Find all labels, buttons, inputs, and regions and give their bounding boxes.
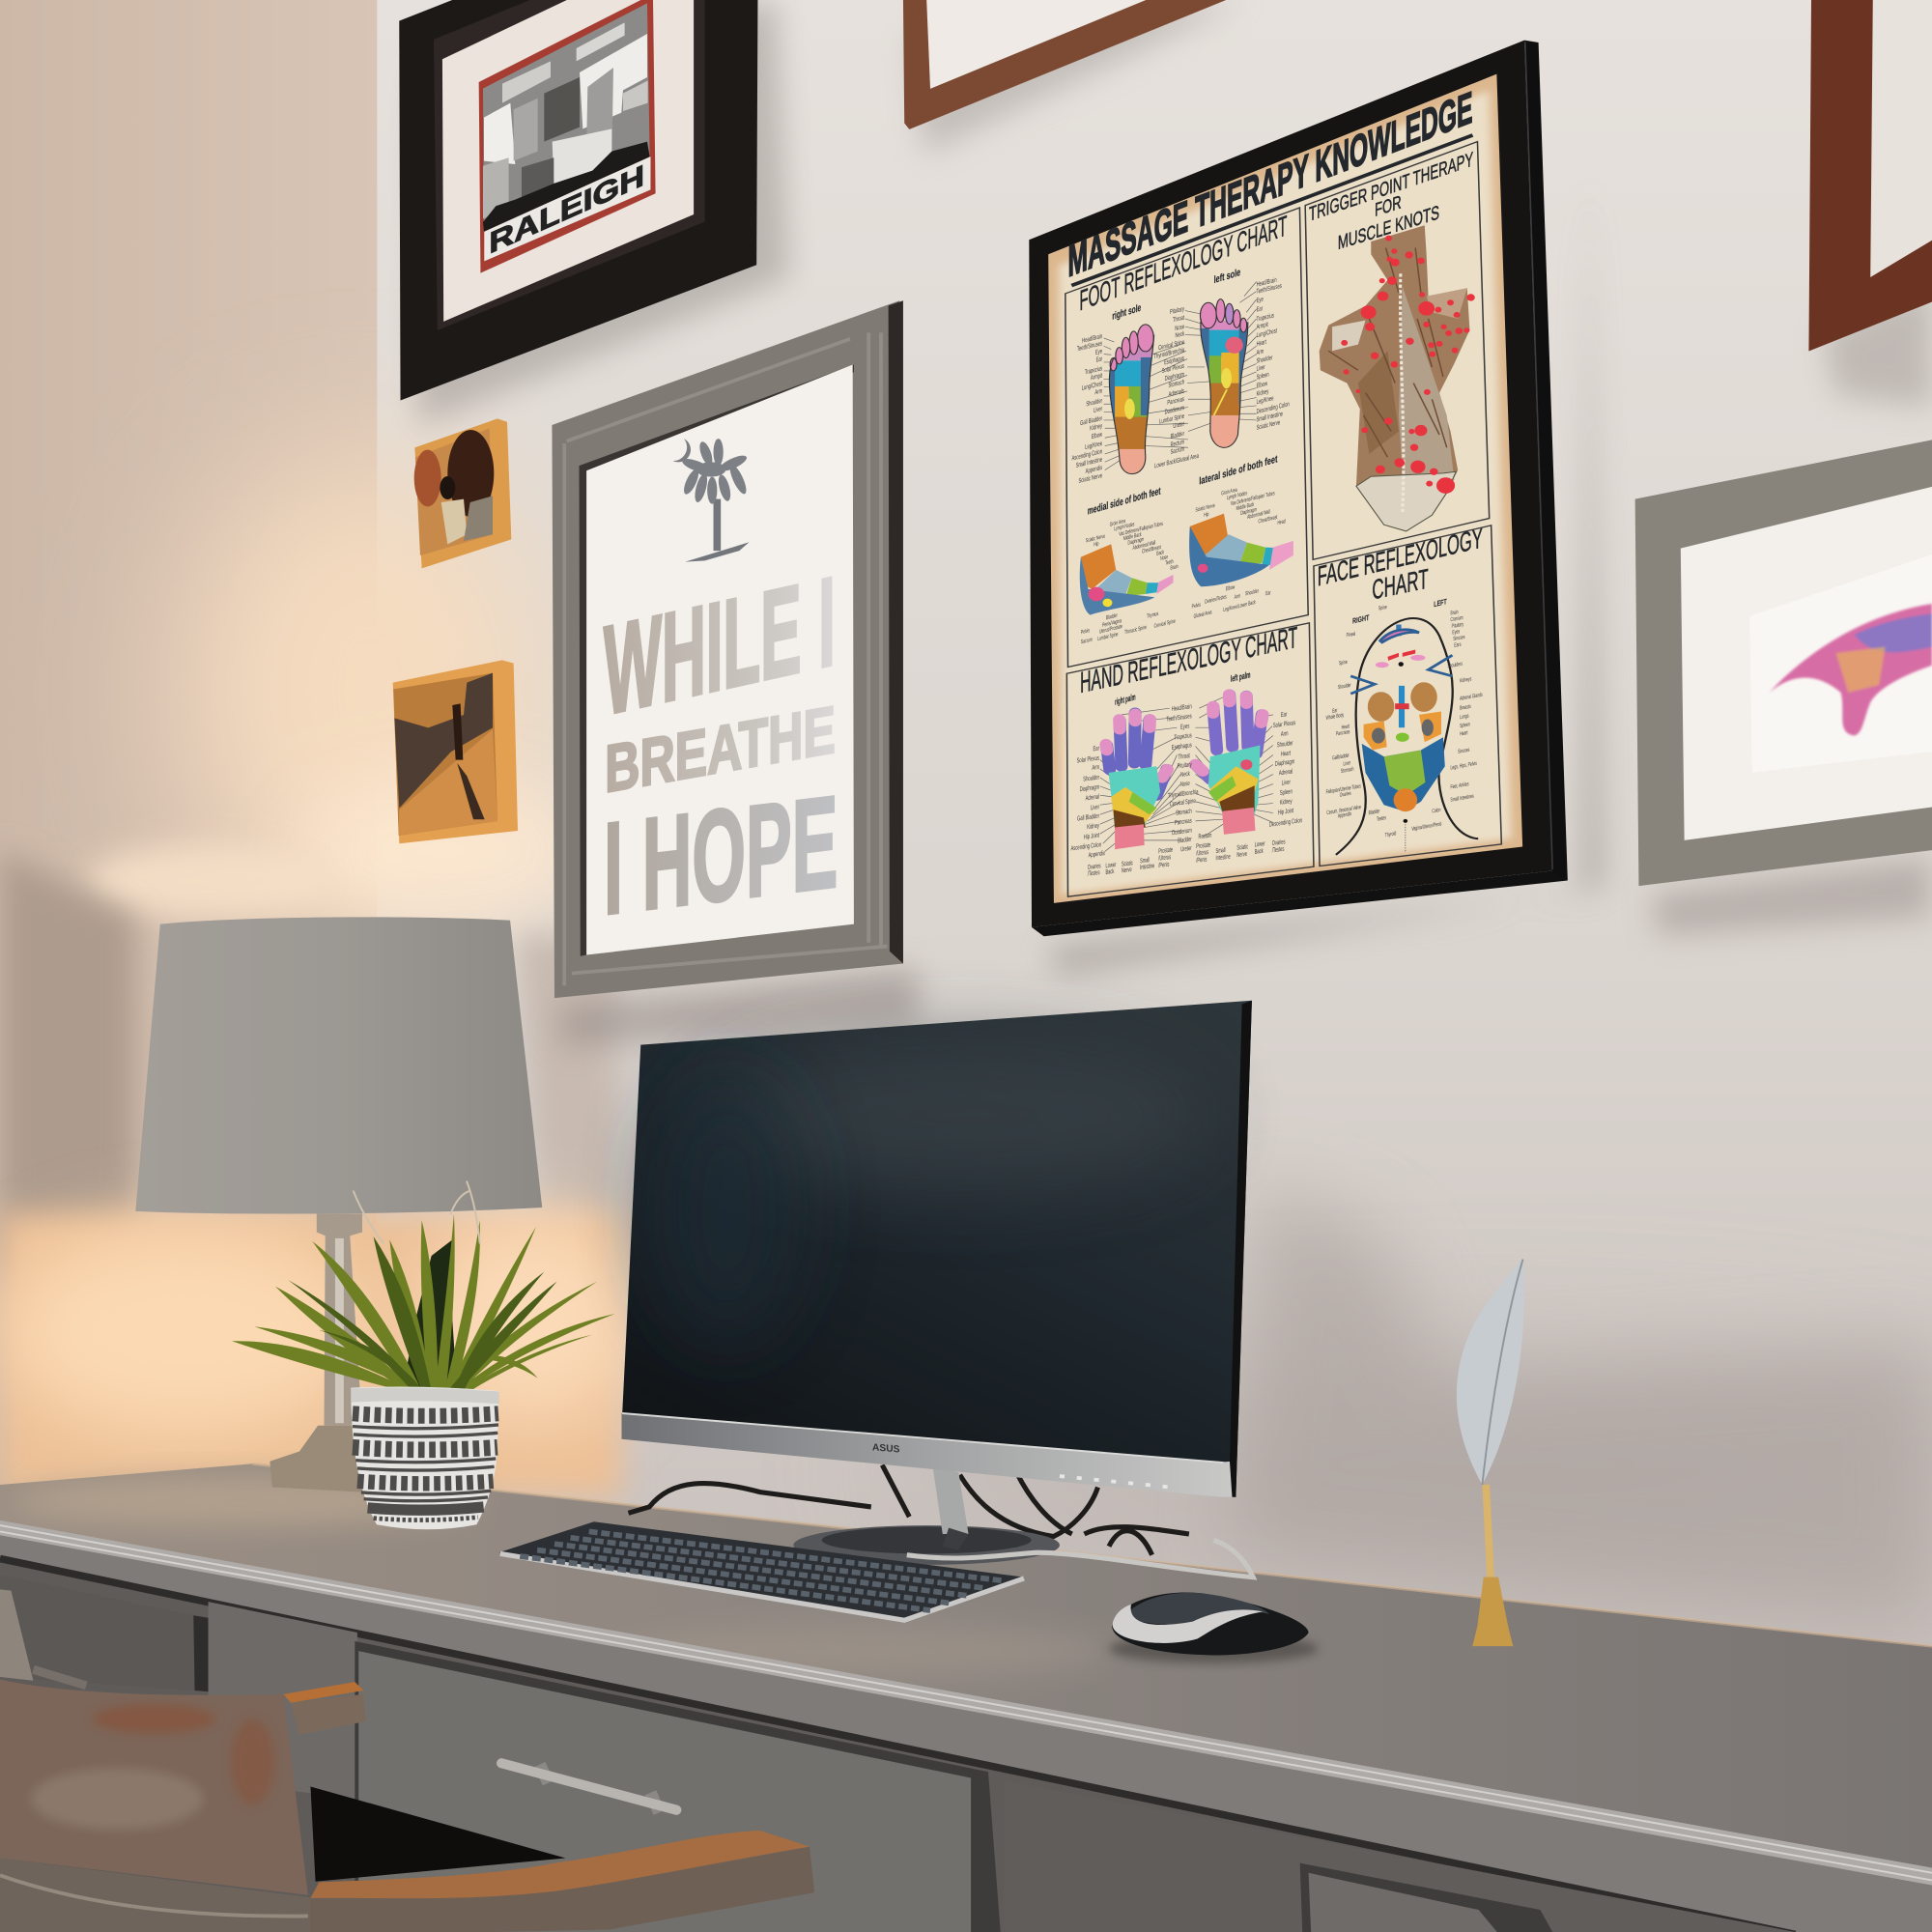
labels: right sole: Leg/Knee (1085, 440, 1102, 452)
labels: centre of hands: Neck (1180, 771, 1190, 780)
labels: right hand: Ear (1094, 746, 1099, 753)
monitor stand (793, 1525, 1060, 1565)
labels: centre of hands: Head/Brain (1172, 703, 1192, 713)
print border (479, 0, 656, 273)
labels: right sole: Teeth/Sinuses (1077, 340, 1102, 354)
leader lines: soles (1104, 282, 1257, 470)
labels: left sole (1257, 274, 1290, 432)
labels: centre of hands: Pituitary (1178, 761, 1192, 771)
labels: foot side views: Thoracic Spine (1124, 624, 1147, 637)
chair back rail (0, 1680, 308, 1895)
labels: centre column: Cervical Spine (1158, 339, 1184, 353)
chair arm (310, 1847, 814, 1932)
labels: bottom of hands (1088, 823, 1286, 879)
labels: left sole: Heart (1257, 339, 1266, 349)
labels: foot side views: Chest/Breast (1259, 514, 1278, 526)
labels: centre column: Bladder (1171, 431, 1184, 440)
labels: centre of hands: Cervical Spine (1170, 798, 1196, 809)
photo block: couple (414, 418, 511, 568)
frame: While I Breathe I Hope (552, 300, 918, 1047)
labels: face: Feet, Ankles (1451, 781, 1469, 791)
labels: right sole: Ascending Colon (1072, 448, 1102, 463)
labels: foot side views: Abdominal Wall (1247, 508, 1270, 522)
labels: face: Eyes (1452, 628, 1460, 637)
labels: face: Heart (1342, 723, 1350, 731)
labels: foot side views: Middle Back (1236, 501, 1255, 513)
labels: face: Lungs (1460, 713, 1469, 722)
labels: face: Breasts (1460, 703, 1471, 712)
labels: centre of hands: Ureter (1180, 845, 1192, 854)
labels: left sole: Lung/Chest (1257, 327, 1277, 340)
labels: left sole: Descending Colon (1257, 401, 1290, 416)
chair (0, 1589, 814, 1932)
labels: foot side views: Sciatic Nerve (1196, 502, 1215, 514)
heading: chart: CHART (1372, 563, 1429, 606)
labels: centre of hands: Nose (1180, 781, 1190, 789)
labels: right sole: Elbow (1092, 432, 1103, 441)
labels: left sole: Eye (1257, 297, 1264, 305)
labels: bottom of hands: /Uterus (1196, 849, 1208, 858)
labels: face: Ear (1332, 707, 1338, 715)
monitor screen (622, 1001, 1252, 1497)
labels: centre of hands: Teeth/Sinuses (1166, 713, 1192, 724)
labels: bottom of hands: Rectum (1199, 833, 1212, 841)
drawer handle (501, 1763, 676, 1812)
labels: left hand: Spleen (1280, 788, 1293, 797)
labels: left sole: Sciatic Nerve (1257, 419, 1280, 432)
desk rim (0, 1520, 1932, 1886)
labels: foot side views: Arm (1235, 593, 1240, 601)
labels: centre column: Thyroid/Bronchia (1153, 347, 1185, 361)
labels: centre column: Ureter (1173, 421, 1184, 431)
chair rail end (283, 1682, 363, 1703)
labels: bottom of hands: Small (1216, 847, 1226, 856)
labels: centre of hands: Duodenum (1172, 828, 1192, 838)
labels: right sole: Appendix (1086, 465, 1102, 475)
labels: foot side views: Elbow (1226, 583, 1236, 593)
labels: face: Shoulder (1338, 682, 1351, 692)
chart: medial foot (1080, 544, 1174, 615)
labels: right sole: Gall Bladder (1080, 415, 1102, 428)
frame: top right brown (1808, 0, 1932, 407)
labels: face: Colon (1432, 807, 1441, 815)
labels: left hand: Hip Joint (1278, 808, 1293, 817)
labels: centre of hands: Eyes (1180, 724, 1189, 731)
labels: centre of hands: Stomach (1176, 809, 1192, 817)
labels: face: Cecum, Ileocecal Valve (1326, 804, 1361, 817)
lamp base (270, 1426, 362, 1492)
labels: left sole: Leg/Knee (1257, 395, 1274, 407)
labels: right sole: Trapezius (1085, 365, 1102, 377)
labels: centre of hands: Thyroid/Bronchia (1168, 789, 1199, 800)
labels: left sole: Trapezius (1257, 313, 1274, 324)
labels: right hand: Arm (1092, 764, 1099, 772)
frame: top centre brown (903, 0, 1244, 154)
labels: centre column: Nose (1175, 324, 1184, 333)
labels: foot side views: Lumbar Spine (1097, 631, 1119, 643)
desk (0, 1463, 1932, 1932)
text: BREATHE: BREATHE (605, 692, 836, 807)
heading: trigger point therapy: TRIGGER POINT THERAPY (1309, 147, 1473, 225)
labels: foot side views: Head (1277, 518, 1286, 527)
labels: right hand: Shoulder (1083, 775, 1099, 783)
labels: bottom of hands: Sciatic (1122, 860, 1133, 868)
labels: foot side views: Sciatic Nerve (1086, 533, 1105, 545)
labels: right sole: Liver (1094, 406, 1102, 414)
figure: back muscles (1320, 225, 1475, 531)
labels: bottom of hands: Lower (1106, 862, 1117, 870)
label: left: LEFT (1434, 597, 1447, 609)
labels: left hand: Descending Colon (1269, 817, 1302, 829)
label: lateral side of both feet: lateral side of both feet (1199, 453, 1278, 487)
brand label: ASUS (872, 1442, 900, 1456)
icon: palmetto tree and moon (672, 439, 750, 562)
cables (629, 1465, 1189, 1555)
labels: centre column: Lower Back/Gluteal Area (1154, 453, 1199, 470)
plant (232, 1181, 615, 1392)
labels: left sole: Armpit (1257, 322, 1268, 331)
labels: centre of hands: Esophagus (1172, 742, 1192, 752)
trigger point dots (1341, 236, 1475, 494)
labels: face: Kidneys (1460, 675, 1472, 685)
labels: left hand: Adrenal (1279, 769, 1293, 778)
labels: face: Adrenal Glands (1460, 692, 1483, 702)
labels: bottom of hands: /Testes (1272, 846, 1285, 855)
labels: left hand: Diaphragm (1275, 758, 1294, 768)
labels: bottom of hands: Small (1140, 857, 1150, 866)
poster paper (1048, 74, 1522, 903)
photo block: beach silhouette (393, 660, 518, 843)
labels: face: Pineal (1347, 631, 1355, 639)
labels: foot side views: Vas Deferens/Fallopian Tubes (1231, 490, 1275, 508)
monitor shadow on wall (1233, 1182, 1932, 1627)
labels: right hand: Solar Plexus (1077, 755, 1099, 765)
labels: foot side views: Gluteal Area (1194, 609, 1212, 620)
labels: foot side views: Cervical Spine (1154, 618, 1176, 630)
labels: foot side views: Ovaries/Testes (1205, 593, 1227, 606)
panel: hand reflexology (1066, 621, 1314, 896)
labels: right hand: Liver (1091, 804, 1099, 812)
labels: foot side views: Uterus/Prostate (1099, 623, 1122, 636)
labels: left sole: Small Intestine (1257, 411, 1283, 424)
labels: foot side views: Diaphragm (1127, 536, 1144, 547)
labels: face: Shoulders (1447, 661, 1463, 670)
panel: face reflexology (1314, 523, 1501, 867)
labels: foot side views (1081, 475, 1286, 649)
labels: right hand: Hip Joint (1084, 833, 1099, 841)
labels: foot side views: Thymus (1147, 611, 1159, 620)
labels: bottom of hands: Intestine (1140, 863, 1154, 871)
labels: bottom of hands: Nerve (1236, 851, 1247, 860)
labels: centre column (1153, 302, 1199, 470)
labels: face: Spine (1339, 659, 1348, 668)
chart: face (1336, 618, 1478, 855)
labels: face: Gallbladder (1332, 753, 1350, 762)
labels: bottom of hands: /Penis (1196, 857, 1208, 865)
labels: foot side views: Groin Area (1110, 518, 1125, 528)
labels: face: Ovaries (1340, 790, 1351, 799)
labels: centre column: Stomach (1169, 379, 1184, 390)
labels: bottom of hands: Sciatic (1236, 843, 1248, 852)
labels: face: Ears (1454, 641, 1462, 649)
labels: foot side views: Nose (1160, 554, 1168, 562)
labels: right sole (1072, 333, 1103, 487)
monitor (621, 1001, 1252, 1565)
labels: face: Whole Body (1326, 712, 1344, 722)
labels: face: Fallopian/Uterine Tubes (1326, 782, 1361, 796)
chair seat shadow (310, 1786, 565, 1882)
chart: right sole (1109, 324, 1155, 475)
labels: right sole: Kidney (1090, 423, 1102, 433)
labels: left sole: Kidney (1257, 388, 1268, 398)
labels: face: Heart (1460, 729, 1468, 738)
plant pot (351, 1387, 499, 1529)
labels: face: Thyroid (1385, 830, 1396, 839)
labels: right hand: Appendix (1089, 850, 1105, 860)
label: left sole: left sole (1214, 267, 1240, 286)
labels: left sole: Elbow (1257, 381, 1268, 390)
monitor buttons (1060, 1476, 1171, 1488)
frame: Raleigh print (399, 0, 788, 425)
labels: left hand: Kidney (1280, 798, 1293, 807)
labels: right hand (1070, 745, 1105, 862)
labels: right sole: Eye (1095, 348, 1102, 356)
labels: face: Appendix (1338, 810, 1352, 820)
labels: face: Cranium (1451, 614, 1463, 624)
labels: foot side views: Shoulder (1245, 587, 1259, 598)
labels: left hand: Arm (1281, 730, 1289, 739)
labels: right sole: Small Intestine (1076, 457, 1102, 469)
white cable (907, 1540, 1253, 1577)
labels: foot side views: Diaphragm (1240, 506, 1257, 518)
labels: face: Pituitary (1452, 621, 1463, 630)
labels: left hand (1269, 709, 1302, 829)
lamp shade (135, 917, 542, 1214)
labels: foot side views: Groin Area (1221, 487, 1237, 497)
labels: foot side views: Penis/Vagina (1102, 617, 1122, 629)
labels: left sole: Shoulder (1257, 355, 1272, 365)
poster: Massage Therapy Knowledge: FOOT REFLEXOLOGY CHART (1079, 209, 1287, 317)
labels: foot side views: Middle Back (1123, 531, 1142, 543)
labels: bottom of hands: /Uterus (1158, 854, 1171, 863)
labels: foot side views: Back (1156, 549, 1164, 557)
chair upright (0, 1589, 33, 1681)
frame dark side (889, 300, 903, 963)
labels: left hand: Ear (1281, 711, 1287, 720)
labels: centre of hands: Throat (1179, 753, 1190, 761)
labels: face: Legs, Hips, Pelvis (1451, 760, 1477, 772)
label: medial side of both feet: medial side of both feet (1088, 485, 1161, 517)
lamp (135, 917, 542, 1492)
labels: face: Spine (1378, 604, 1387, 612)
labels: foot side views: Teeth (1165, 558, 1174, 567)
labels: right sole: Sciatic Nerve (1078, 472, 1102, 485)
labels: face: Bladder (1369, 808, 1380, 817)
print name band (484, 156, 650, 261)
labels: foot side views: Ear (1265, 589, 1271, 598)
labels: centre column: Solar Plexus (1162, 363, 1184, 376)
monitor bezel (621, 1413, 1233, 1497)
poster: Massage Therapy Knowledge: HAND REFLEXOLOGY CHART (1080, 621, 1297, 700)
lamp column (317, 1213, 362, 1426)
labels: right hand: Kidney (1087, 823, 1099, 832)
labels: face: Vagina/Uterus/Penis (1411, 821, 1442, 833)
chart: right hand (1106, 713, 1167, 849)
desk top surface (0, 1463, 1932, 1868)
labels: bottom of hands: Intestine (1216, 854, 1231, 863)
mouse (1109, 1592, 1319, 1663)
panel: foot reflexology (1065, 208, 1308, 668)
labels: face: Sinuses (1458, 747, 1470, 755)
labels: face: Spleen (1460, 721, 1470, 730)
labels: bottom of hands: Ovaries (1272, 838, 1286, 847)
labels: left hand: Shoulder (1277, 740, 1293, 750)
labels: right hand: Ascending Colon (1070, 841, 1101, 853)
labels: left hand: Heart (1281, 751, 1291, 758)
labels: face: Sinuses (1453, 634, 1465, 643)
labels: foot side views: Lymph Nodes (1227, 490, 1247, 502)
labels: left sole: Arm (1257, 349, 1264, 357)
labels: right hand: Diaphragm (1080, 784, 1099, 794)
labels: left sole: Spleen (1257, 372, 1269, 382)
labels: foot side views: Brain (1170, 563, 1179, 572)
labels: foot side views: Pelvis (1192, 602, 1201, 611)
text: I HOPE: I HOPE (604, 768, 838, 942)
heading: muscle knots: MUSCLE KNOTS (1338, 201, 1439, 254)
labels: face: Stomach (1341, 766, 1354, 775)
labels: face: Small Intestines (1451, 793, 1474, 804)
labels: left sole: Head/Brain (1257, 277, 1277, 289)
labels: foot side views: Lymph Nodes (1114, 521, 1135, 533)
labels: centre column: Esophagus (1164, 355, 1184, 367)
chart: lateral foot (1189, 514, 1293, 586)
labels: centre column: Pituitary (1170, 306, 1184, 317)
frame: While I Breathe I Hope: WHILE I (604, 550, 836, 741)
drawer: small left (0, 1575, 195, 1690)
labels: bottom of hands: /Penis (1158, 862, 1169, 869)
labels: bottom of hands: Prostate (1196, 842, 1210, 851)
labels: right sole: Lung/Chest (1082, 381, 1102, 392)
labels: foot side views: Chest/Breast (1142, 544, 1161, 555)
labels: face (1326, 587, 1483, 849)
labels: centre column: Throat (1173, 315, 1184, 325)
text: RALEIGH: RALEIGH (489, 157, 644, 260)
labels: centre column: Neck (1176, 330, 1184, 340)
leader lines: hands (1100, 694, 1273, 852)
labels: foot side views: Hip (1094, 540, 1099, 549)
labels: foot side views: Sacrum (1081, 637, 1093, 646)
labels: bottom of hands: /Testes (1088, 869, 1100, 878)
labels: right sole: Arm (1094, 388, 1102, 397)
labels: left sole: Teeth/Sinuses (1257, 283, 1282, 296)
desk cabinet (0, 1556, 1795, 1932)
labels: foot side views: Hip (1204, 511, 1209, 519)
labels: face: Testes (1377, 814, 1386, 823)
labels: right sole: Ear (1096, 355, 1102, 364)
keyboard (499, 1521, 1024, 1620)
labels: bottom of hands: Prostate (1158, 847, 1173, 856)
heading: for: FOR (1375, 191, 1402, 220)
labels: face: Brain (1451, 609, 1459, 617)
frame: dinosaur watercolor (1635, 440, 1932, 936)
labels: face: Pancreas (1336, 728, 1350, 738)
panel: trigger point therapy (1305, 142, 1490, 559)
labels: left sole: Liver (1257, 364, 1265, 373)
poster: Massage Therapy Knowledge (1029, 41, 1568, 936)
labels: centre column: Lumbar Spine (1159, 413, 1184, 426)
labels: bottom of hands: Lower (1255, 840, 1265, 849)
labels: centre column: Rectum (1171, 439, 1184, 449)
labels: foot side views: Pelvis (1081, 627, 1090, 637)
poster frame (1029, 41, 1568, 936)
labels: centre of hands (1166, 702, 1199, 856)
heading: face reflexology: FACE REFLEXOLOGY (1318, 523, 1483, 592)
labels: centre of hands: Trapezius (1175, 732, 1192, 742)
labels: right hand: Gall Bladder (1077, 813, 1099, 823)
drawer: main (355, 1641, 1001, 1932)
labels: bottom of hands: Back (1106, 868, 1115, 876)
labels: centre column: Duodenum (1165, 405, 1184, 416)
labels: centre of hands: Pancreas (1175, 818, 1192, 827)
labels: foot side views: Leg/Knee/Lower Back (1223, 599, 1256, 614)
labels: left hand: Liver (1282, 780, 1291, 787)
icon: dinosaur (1770, 604, 1932, 735)
labels: foot side views: Abdominal Wall (1132, 539, 1155, 552)
skyline print (483, 3, 650, 232)
panel: hand reflexology: left palm (1231, 670, 1251, 685)
panel: hand reflexology: right palm (1115, 693, 1136, 708)
label: right sole: right sole (1112, 301, 1141, 323)
labels: centre column: Pancreas (1167, 396, 1184, 407)
poster shadow (1047, 173, 1602, 974)
labels: foot side views: Bladder (1106, 612, 1118, 622)
labels: right sole: Head/Brain (1082, 333, 1102, 345)
labels: left hand: Solar Plexus (1273, 720, 1295, 730)
chart: left sole (1200, 298, 1248, 448)
label: right: RIGHT (1352, 612, 1370, 625)
feather quill (1457, 1260, 1524, 1646)
labels: bottom of hands: Ovaries (1088, 863, 1101, 871)
labels: centre column: Diaphragm (1165, 371, 1184, 383)
chart: left hand (1196, 695, 1263, 835)
labels: bottom of hands: Back (1255, 848, 1264, 856)
chair lower band (0, 1858, 493, 1932)
labels: centre column: Adrenals (1169, 388, 1184, 399)
labels: bottom of hands: Nerve (1122, 867, 1132, 875)
labels: right sole: Armpit (1091, 373, 1102, 383)
labels: foot side views: Vas Deferens/Fallopian Tubes (1119, 521, 1163, 538)
labels: left sole: Ear (1257, 305, 1263, 314)
drawer: right (1005, 1780, 1795, 1932)
labels: right hand: Adrenal (1086, 794, 1099, 803)
labels: face: Liver (1344, 759, 1350, 768)
labels: centre column: Sacrum (1171, 446, 1184, 456)
labels: centre of hands: Bladder (1178, 837, 1192, 845)
labels: right sole: Shoulder (1086, 398, 1102, 409)
